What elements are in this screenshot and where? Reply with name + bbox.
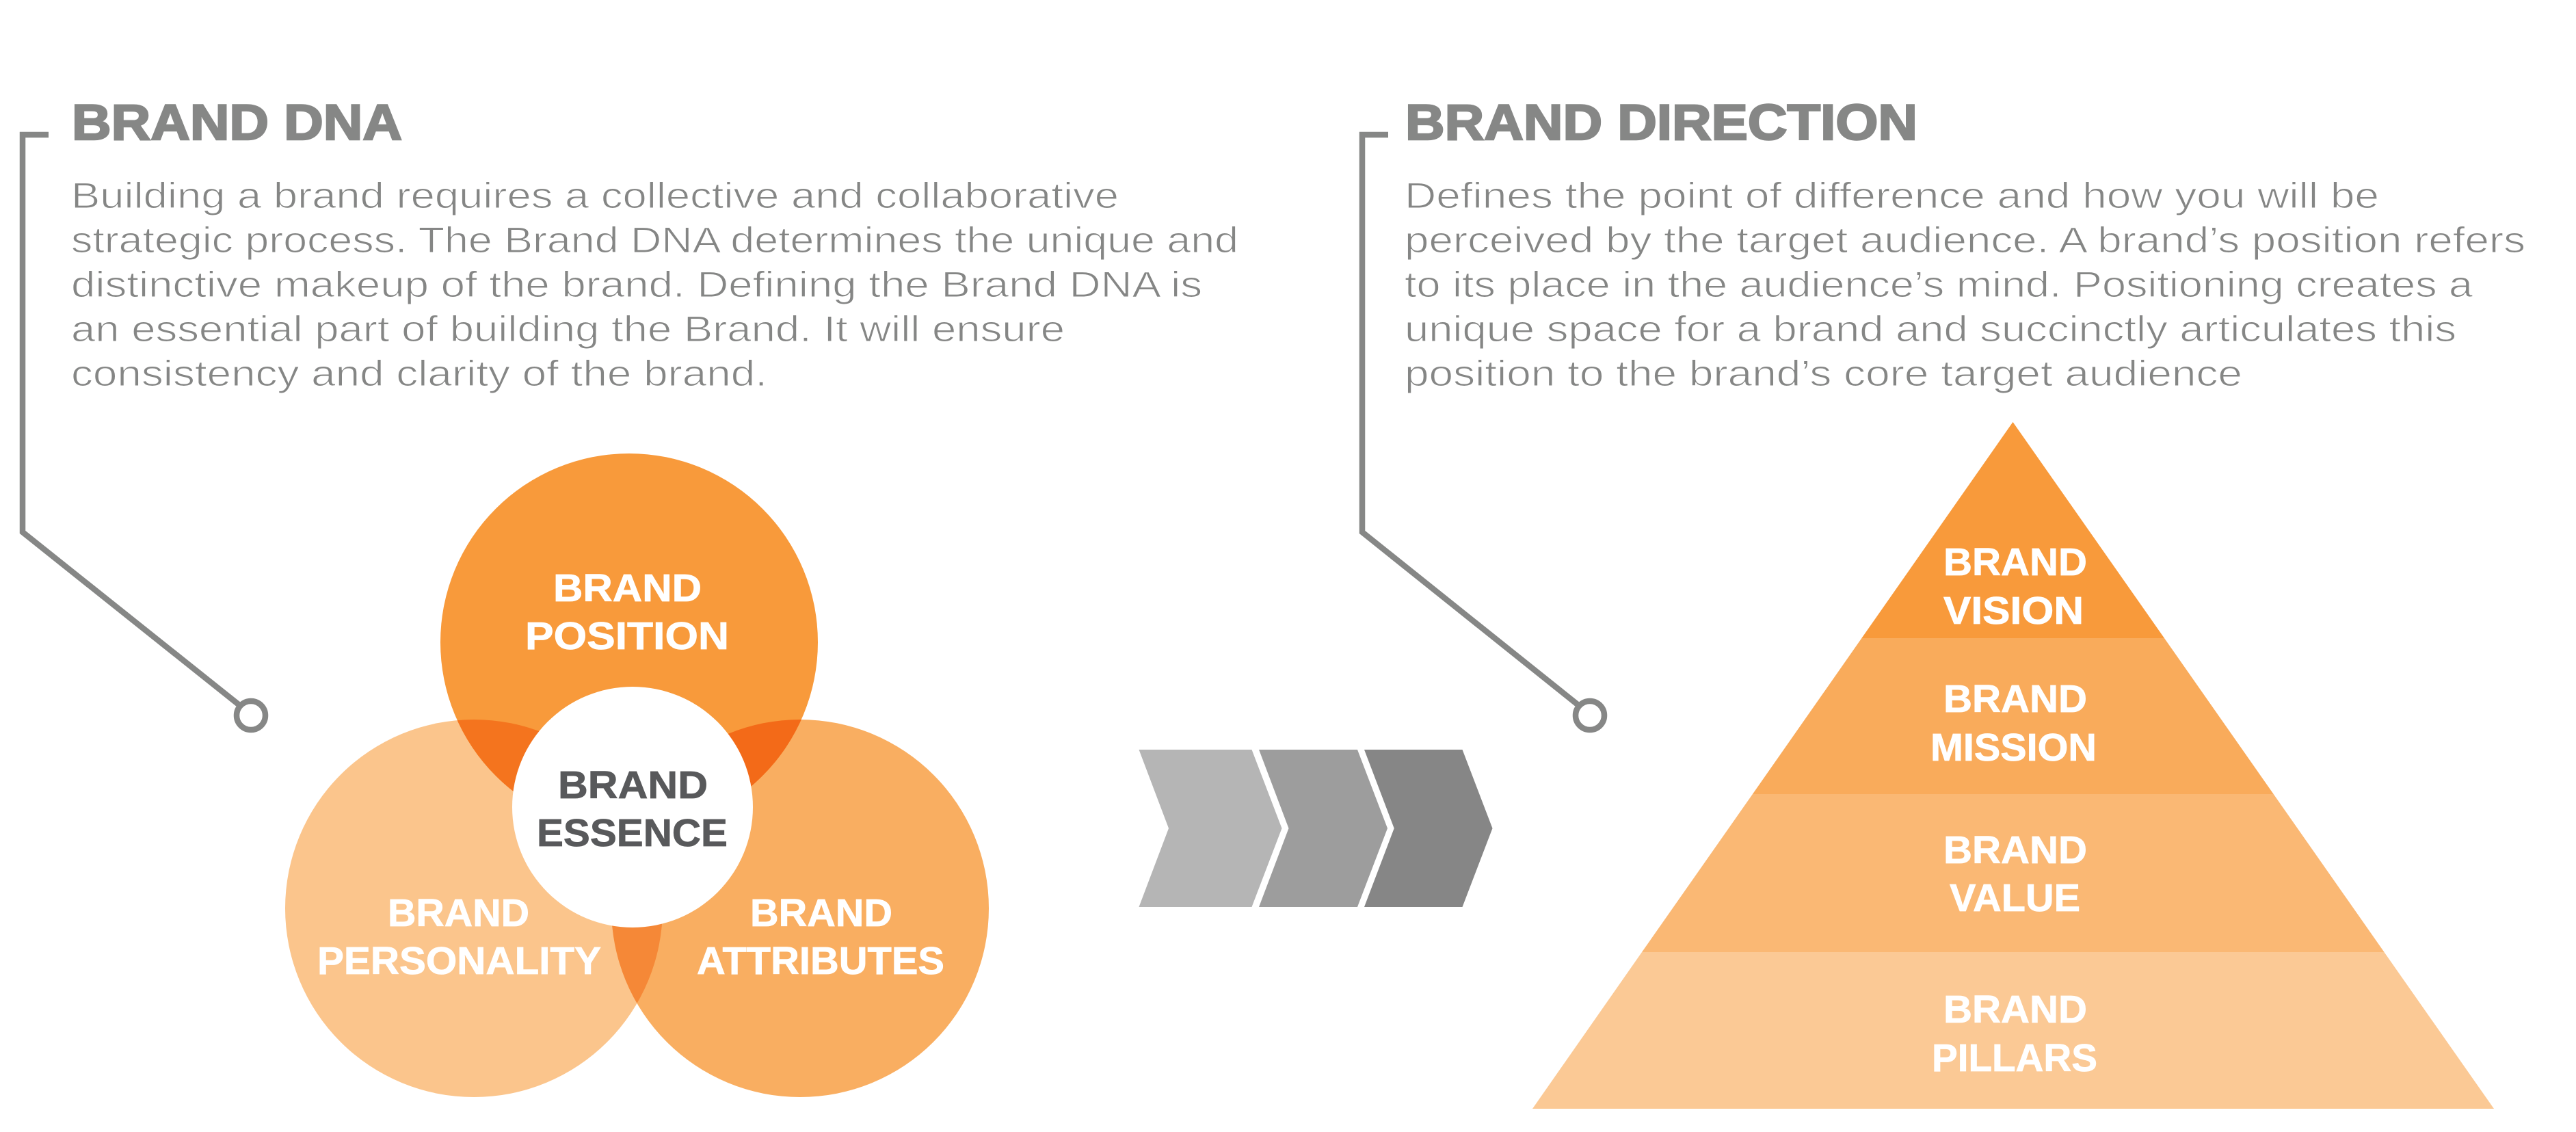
pyramid tier: brand mission [1753, 638, 2274, 794]
label: brand essence: BRAND [558, 763, 708, 807]
label: brand position: POSITION [525, 614, 729, 658]
text block: brand DNA description: consistency and clarity of the brand. [71, 354, 767, 394]
text block: brand direction description: unique space for a brand and succinctly articulates this [1405, 309, 2456, 350]
label: brand mission [1930, 677, 2097, 769]
overlap: position and attributes [728, 720, 801, 787]
pyramid tier: brand vision [1861, 422, 2164, 638]
text block: brand direction description: Defines the point of difference and how you will be [1405, 176, 2379, 216]
callout leader: brand DNA [23, 135, 265, 730]
overlap: position and personality [457, 720, 539, 791]
label: brand position [525, 566, 729, 658]
label: brand mission: MISSION [1930, 726, 2097, 769]
text block: brand DNA description: distinctive makeup of the brand. Defining the Brand DNA is [71, 265, 1202, 305]
label: brand attributes: BRAND [750, 891, 892, 935]
text block: brand direction description: position to the brand’s core target audience [1405, 354, 2242, 394]
label: brand value [1943, 828, 2087, 920]
heading: brand direction: BRAND DIRECTION [1405, 95, 1917, 150]
pyramid tier: brand value [1642, 794, 2384, 952]
label: brand personality [317, 891, 601, 983]
panel: brand direction [1362, 95, 2525, 1109]
venn diagram: brand essence [285, 453, 989, 1097]
text block: brand DNA description: strategic process. The Brand DNA determines the unique and [71, 220, 1238, 261]
label: brand position: BRAND [553, 566, 702, 610]
panel: brand DNA [23, 95, 1238, 1097]
text block: brand direction description [1405, 176, 2525, 394]
label: brand pillars: BRAND [1943, 988, 2087, 1031]
text block: brand DNA description: Building a brand requires a collective and collaborative [71, 176, 1119, 216]
label: brand personality: PERSONALITY [317, 939, 601, 983]
label: brand vision: VISION [1943, 589, 2084, 633]
label: brand pillars [1932, 988, 2097, 1080]
label: brand attributes [697, 891, 944, 983]
label: brand value: BRAND [1943, 828, 2087, 872]
pyramid chart [1532, 422, 2494, 1109]
circle: brand essence [512, 687, 753, 927]
label: brand essence [537, 763, 728, 855]
label: brand attributes: ATTRIBUTES [697, 939, 944, 983]
text block: brand direction description: perceived by the target audience. A brand’s position refers [1405, 220, 2525, 261]
circle: brand position [440, 453, 818, 831]
label: brand value: VALUE [1950, 876, 2080, 920]
label: brand vision [1943, 540, 2087, 633]
label: brand pillars: PILLARS [1932, 1036, 2097, 1080]
overlap: personality and attributes [612, 923, 662, 1003]
pyramid tier: brand pillars [1532, 952, 2494, 1109]
label: brand essence: ESSENCE [537, 811, 728, 855]
text block: brand DNA description [71, 176, 1238, 394]
circle: brand personality [285, 720, 663, 1097]
label: brand vision: BRAND [1943, 540, 2087, 584]
label: brand personality: BRAND [388, 891, 529, 935]
circle: brand attributes [611, 720, 989, 1097]
label: brand mission: BRAND [1943, 677, 2087, 721]
text block: brand direction description: to its place in the audience’s mind. Positioning creates a [1405, 265, 2473, 305]
text block: brand DNA description: an essential part of building the Brand. It will ensure [71, 309, 1065, 350]
arrows: chevrons [1139, 750, 1492, 907]
heading: brand DNA: BRAND DNA [72, 95, 402, 150]
callout leader: brand direction [1362, 135, 1604, 730]
